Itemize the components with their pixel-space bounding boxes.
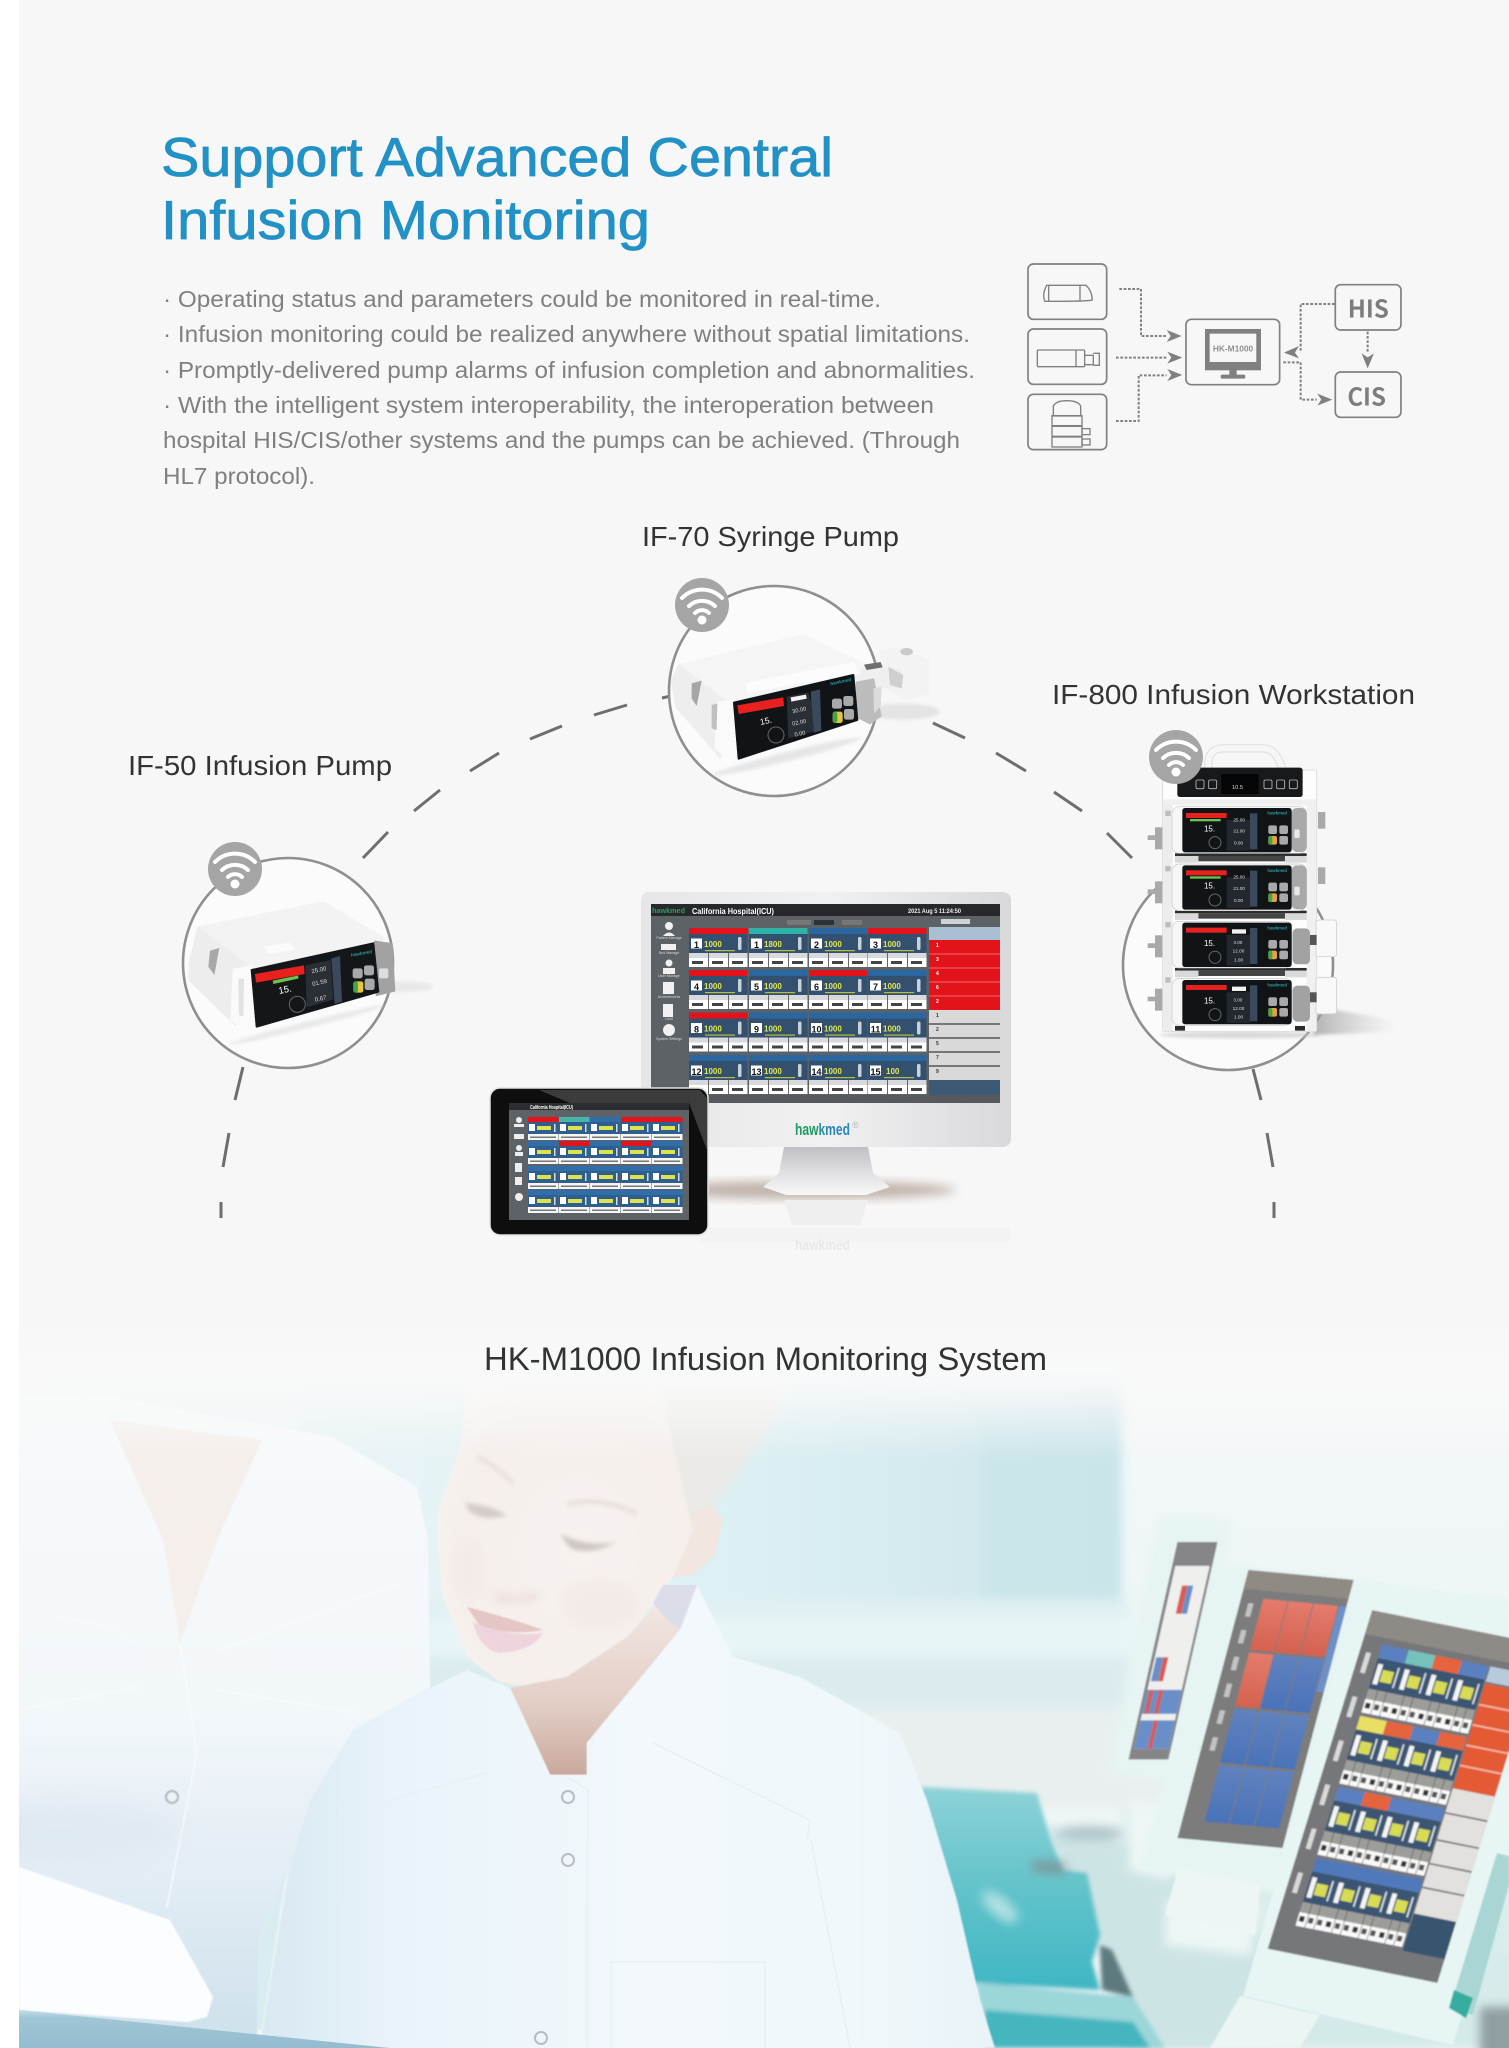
circle: IF-70 — [669, 586, 879, 796]
patient grid: 7 — [873, 982, 878, 992]
pump module 1: 15. — [1204, 824, 1215, 833]
bullet list text: · With the intelligent system interoperability, the interoperation between — [163, 392, 934, 418]
patient grid: 1000 — [824, 982, 842, 991]
alarm side panel: 4 — [936, 971, 939, 977]
lips — [467, 1607, 543, 1653]
device: IF-800 infusion workstation — [1148, 748, 1397, 1038]
syringe holder — [879, 647, 930, 700]
patient grid: 1000 — [883, 1024, 901, 1034]
bullet list text — [163, 286, 975, 489]
glove — [19, 1867, 213, 2022]
left clamps — [1148, 827, 1162, 1011]
device: IF-70 syringe pump: hawkmed — [830, 677, 852, 686]
system label: HK-M1000 Infusion Monitoring System — [484, 1341, 1047, 1377]
desktop monitor: Patient Manage — [656, 936, 682, 940]
clamp — [857, 679, 881, 723]
bullet list text: HL7 protocol). — [163, 463, 315, 489]
patient grid: 2 — [814, 940, 819, 950]
handle — [1208, 748, 1283, 770]
patient grid: 4 — [694, 982, 699, 992]
background photo: clinicians viewing central monitors — [19, 1396, 1509, 2048]
tablet: California Hospital(ICU) — [530, 1105, 573, 1111]
system connection diagram — [1028, 264, 1401, 450]
alarm side panel: 3 — [936, 957, 939, 963]
title: Infusion Monitoring — [161, 189, 650, 251]
patient grid: 1000 — [704, 982, 722, 991]
patient grid: 10 — [811, 1024, 822, 1034]
bullet list text: · Promptly-delivered pump alarms of infusion completion and abnormalities. — [163, 357, 975, 383]
device: IF-70 syringe pump: 15. — [759, 715, 773, 727]
alarm side panel: 5 — [936, 1041, 939, 1047]
frame — [1163, 770, 1317, 1032]
near monitor — [1210, 1580, 1509, 2048]
patient grid: 1800 — [764, 940, 782, 949]
pump module 3 — [1172, 920, 1337, 968]
patient grid: 14 — [811, 1067, 822, 1077]
device: IF-50 infusion pump — [190, 903, 433, 1048]
patient grid: 1000 — [824, 940, 842, 949]
device: IF-800 infusion workstation: 10.5 — [1232, 785, 1243, 791]
device: IF-50 infusion pump: 0.67 — [314, 995, 328, 1004]
hawkmed logo: hawkmed — [795, 1120, 850, 1139]
patient grid: 1000 — [824, 1024, 842, 1034]
pump module 4: 15. — [1204, 996, 1215, 1005]
hair — [672, 1422, 766, 1513]
patient grid: 1000 — [824, 1067, 842, 1076]
patient grid: 12 — [691, 1067, 702, 1077]
desktop monitor: 2021 Aug 5 11:24:50 — [908, 909, 962, 915]
pump module 4: 1.00 — [1234, 1015, 1243, 1020]
pump module 3: 3.00 — [1233, 940, 1243, 945]
desktop monitor reflection and shadow — [656, 1181, 1010, 1254]
patient grid: 9 — [754, 1024, 759, 1034]
patient grid: 5 — [754, 982, 759, 992]
patient grid: 8 — [694, 1024, 699, 1034]
patient grid: 1000 — [883, 982, 901, 991]
pump module 2: 25.00 — [1233, 875, 1245, 880]
product label: IF-800: IF-800 Infusion Workstation — [1052, 679, 1415, 710]
device: IF-50 infusion pump: 25.00 — [311, 966, 328, 975]
table and stands — [1040, 1800, 1509, 2048]
pump module 3: 1.00 — [1234, 957, 1243, 962]
desktop monitor — [641, 892, 1011, 1195]
middle monitor — [1166, 1568, 1355, 1934]
product label: IF-50: IF-50 Infusion Pump — [128, 750, 392, 781]
neck — [510, 1603, 680, 1775]
alarm side panel: 1 — [936, 943, 939, 949]
pump module 3: hawkmed — [1267, 925, 1287, 930]
pump module 1: 0.00 — [1234, 841, 1243, 846]
alarm side panel: 2 — [936, 999, 939, 1005]
device: IF-50 infusion pump: 01.59 — [312, 979, 328, 988]
patient grid: 1 — [694, 940, 699, 950]
pump module 2 — [1172, 864, 1307, 911]
monitor glyph — [1206, 331, 1260, 379]
right latches — [1318, 812, 1325, 829]
patient grid: 3 — [873, 940, 878, 950]
pump glyphs — [1037, 285, 1099, 447]
monitor stand — [763, 1147, 890, 1195]
tablet in hand — [19, 2010, 390, 2048]
patient grid: 1000 — [704, 940, 722, 949]
toolbar — [787, 920, 811, 925]
collar inner — [653, 1585, 697, 1630]
patient grid: 100 — [886, 1067, 900, 1076]
patient grid: 6 — [814, 982, 819, 992]
tablet — [490, 1088, 708, 1235]
bezel button strip — [1450, 1853, 1509, 2015]
bullet list text: · Infusion monitoring could be realized anywhere without spatial limitations. — [163, 321, 970, 347]
pump module 3: 15. — [1204, 939, 1215, 948]
top fade of the photo — [19, 1340, 1128, 1445]
circle: IF-50 — [183, 858, 393, 1068]
alarm side panel: 2 — [936, 1027, 939, 1033]
pump module 4: 3.00 — [1233, 997, 1243, 1002]
pump module 1: hawkmed — [1267, 811, 1287, 816]
pump module 4: 12.00 — [1233, 1006, 1245, 1011]
desktop monitor reflection and shadow: hawkmed — [795, 1237, 850, 1254]
title — [161, 126, 833, 251]
monitor body — [641, 892, 1011, 1147]
alarm side panel: 7 — [936, 1055, 939, 1061]
desktop monitor: Bed Manage — [659, 951, 679, 955]
desktop monitor: Achievements — [658, 995, 680, 999]
coat — [260, 1585, 995, 2048]
divider shelves — [1175, 853, 1307, 1031]
dotted arrows — [1116, 289, 1368, 421]
eyes and brows — [465, 1457, 637, 1551]
ear — [672, 1505, 723, 1578]
far monitor — [1128, 1520, 1226, 1760]
alarm side panel: 1 — [936, 1013, 939, 1019]
desktop monitor: California Hospital(ICU) — [692, 906, 774, 916]
pump module 1: 21.00 — [1233, 829, 1245, 834]
pump body — [679, 636, 862, 702]
main clinician — [19, 1380, 995, 2048]
patient grid — [689, 928, 926, 1094]
alarm side panel: 6 — [936, 985, 939, 991]
patient grid: 11 — [871, 1024, 880, 1034]
monitors in the background — [1108, 1515, 1509, 2048]
pump module 2: 21.00 — [1233, 886, 1245, 891]
sidebar icons — [661, 922, 676, 1036]
pump module 2: 15. — [1204, 882, 1215, 891]
product label: IF-70: IF-70 Syringe Pump — [642, 521, 899, 552]
patient grid: 15 — [870, 1067, 881, 1077]
desktop monitor: ® — [852, 1120, 859, 1130]
desktop monitor: System Settings — [656, 1037, 682, 1041]
pump module 1: 25.00 — [1233, 817, 1245, 822]
device: IF-70 syringe pump: 02.00 — [792, 719, 807, 728]
title: Support Advanced Central — [161, 126, 833, 188]
face — [438, 1380, 693, 1687]
photo backdrop — [258, 1392, 1509, 2048]
keypad — [832, 699, 842, 709]
pump module 3: 12.00 — [1233, 949, 1245, 954]
bullet list text: hospital HIS/CIS/other systems and the pumps can be achieved. (Through — [163, 427, 960, 453]
patient grid: 1000 — [764, 1067, 782, 1076]
circle: IF-800 — [1123, 860, 1333, 1070]
device: IF-50 infusion pump: 15. — [278, 983, 292, 996]
back clinician — [19, 1434, 430, 2034]
device: IF-70 syringe pump — [672, 636, 940, 780]
patient grid: 1000 — [764, 1024, 782, 1034]
wifi badge: IF-50 — [208, 842, 262, 896]
pump module 4 — [1172, 977, 1337, 1025]
tablet sidebar icons — [514, 1117, 524, 1201]
patient grid: 1 — [754, 940, 759, 950]
device: IF-50 infusion pump: hawkmed — [351, 949, 373, 958]
system connection diagram: CIS — [1347, 377, 1386, 412]
alarm side panel — [929, 927, 1000, 1095]
pump module 4: hawkmed — [1267, 983, 1287, 988]
patient grid: 1000 — [883, 940, 901, 949]
face shading — [496, 1592, 538, 1604]
wifi badge: IF-800 — [1149, 730, 1203, 784]
monitor glyph: HK-M1000 — [1213, 344, 1253, 354]
teal chairs — [920, 1787, 1165, 2048]
patient grid: 1000 — [704, 1024, 722, 1034]
dashed connection arc — [221, 696, 1274, 1218]
pump module 1 — [1172, 807, 1307, 853]
system connection diagram: HIS — [1348, 289, 1389, 324]
device: IF-70 syringe pump: 30.00 — [792, 706, 807, 715]
tablet patient grid — [528, 1117, 683, 1213]
device: IF-70 syringe pump: 0.00 — [794, 730, 806, 739]
top controller — [1177, 768, 1303, 797]
patient grid: 1000 — [764, 982, 782, 991]
patient grid: 13 — [751, 1067, 762, 1077]
wifi badge: IF-70 — [675, 578, 729, 632]
pump module 2: hawkmed — [1267, 868, 1287, 873]
desktop monitor: Limit — [665, 1017, 673, 1021]
pump module 2: 0.00 — [1234, 898, 1243, 903]
monitor screen — [651, 904, 1000, 1103]
desktop monitor: User Manage — [658, 974, 680, 978]
alarm side panel: 9 — [936, 1069, 939, 1075]
screen — [734, 675, 857, 759]
patient grid: 1000 — [704, 1067, 722, 1076]
desktop monitor: hawkmed — [652, 908, 685, 915]
bullet list text: · Operating status and parameters could be monitored in real-time. — [163, 286, 881, 312]
